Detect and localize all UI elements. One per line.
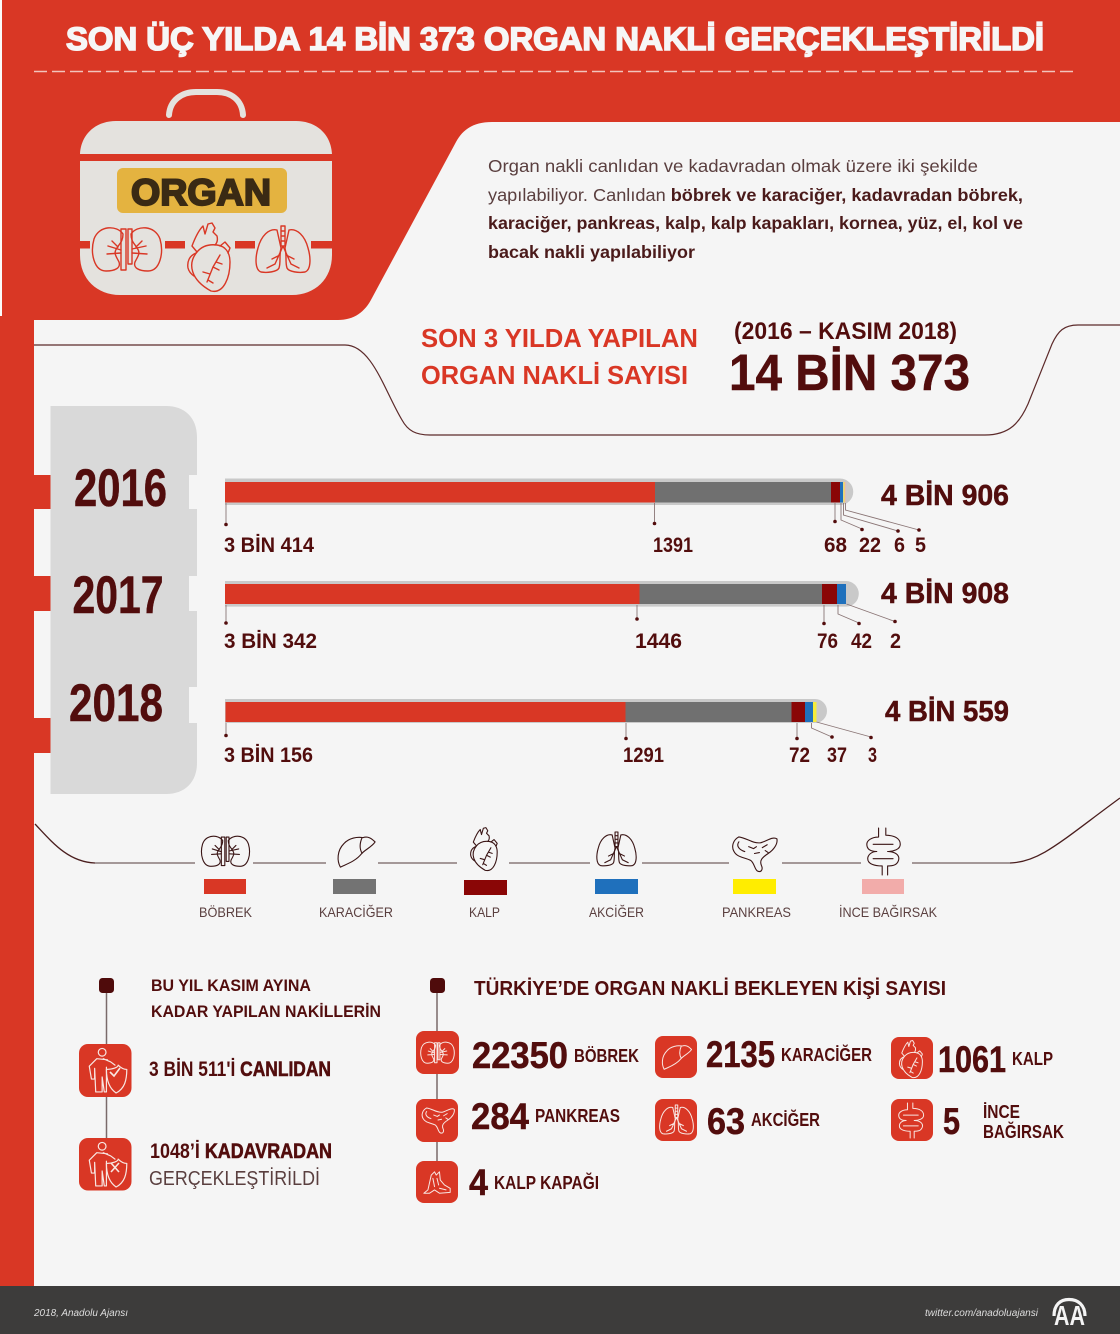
legend item: lungs [589, 832, 644, 920]
legend item: kidney: BÖBREK [199, 903, 253, 920]
deceased donor count: 1048’İ KADAVRADAN [150, 1140, 332, 1163]
footer bar [0, 1286, 1120, 1334]
intro paragraph: bacak nakli yapılabiliyor [488, 242, 695, 262]
legend item: small intestine [839, 828, 938, 920]
stat: pancreas: 284 [471, 1096, 529, 1137]
heading: three-year organ transplants: SON 3 YILDA YAPILAN [421, 323, 698, 353]
stat: heart: 1061 [938, 1039, 1006, 1080]
bar chart 2018 [224, 699, 877, 767]
year column [50, 406, 197, 794]
legend item: lungs: AKCİĞER [589, 903, 644, 920]
bar chart 2016: 1391 [653, 534, 693, 557]
stat: lungs: AKCİĞER [751, 1109, 820, 1130]
deceased donor count: GERÇEKLEŞTİRİLDİ [149, 1167, 320, 1190]
legend item: small intestine: İNCE BAĞIRSAK [839, 903, 938, 920]
stat: small intestine [891, 1099, 1064, 1142]
year 2017: 2017 [72, 566, 164, 625]
stat: kidney: BÖBREK [574, 1046, 639, 1066]
bar chart 2018: 37 [827, 744, 847, 767]
footer credit: 2018, Anadolu Ajansı [33, 1308, 128, 1319]
icon: organ suitcase: ORGAN [131, 172, 271, 213]
stat: liver: 2135 [706, 1034, 775, 1075]
total 2016: 4 BİN 906 [881, 480, 1009, 512]
icon: Anadolu Agency logo: AA [1054, 1300, 1085, 1331]
bar chart 2018: 3 [868, 744, 877, 767]
frame line bottom [35, 798, 1120, 863]
panel: people waiting for transplants [416, 977, 1064, 1203]
stat: kidney: 22350 [472, 1035, 568, 1076]
left white margin [0, 0, 3, 317]
legend item: pancreas: PANKREAS [722, 904, 791, 920]
bar chart 2016: 6 [894, 534, 905, 557]
stat: lungs: 63 [707, 1101, 745, 1142]
legend item: heart: KALP [469, 904, 500, 920]
stat: kidney [416, 1031, 639, 1076]
legend item: heart [464, 828, 507, 920]
bar chart 2017: 1446 [635, 630, 682, 653]
bar chart 2016: 22 [859, 534, 881, 557]
stat: small intestine: İNCE [983, 1102, 1020, 1122]
bar chart 2017: 3 BİN 342 [224, 630, 317, 653]
red year tabs [34, 475, 52, 753]
heading: three-year organ transplants: ORGAN NAKLİ SAYISI [421, 360, 688, 390]
stat: lungs [655, 1099, 820, 1142]
living donor count: 3 BİN 511'İ CANLIDAN [149, 1058, 331, 1081]
stat: pancreas [416, 1096, 620, 1142]
stat: heart valve [416, 1161, 599, 1203]
intro paragraph: yapılabiliyor. Canlıdan böbrek ve karaciğer, kadavradan böbrek, [488, 185, 1023, 205]
subheading: waiting list: TÜRKİYE’DE ORGAN NAKLİ BEKLEYEN KİŞİ SAYISI [474, 977, 946, 1000]
bar chart 2018: 72 [789, 744, 810, 767]
bar chart 2016: 5 [915, 534, 926, 557]
bar chart 2017: 76 [817, 630, 838, 653]
bar chart 2016 [224, 478, 926, 557]
subheading: this year: BU YIL KASIM AYINA [151, 977, 311, 995]
title dashed rule [34, 70, 1075, 72]
stat: heart [891, 1037, 1053, 1080]
legend item: pancreas [722, 837, 791, 920]
intro paragraph [488, 156, 1023, 262]
bar chart 2017: 2 [890, 630, 901, 653]
year 2018: 2018 [69, 674, 163, 733]
stat: liver: KARACİĞER [781, 1044, 872, 1065]
stat: pancreas: PANKREAS [535, 1106, 620, 1126]
date range: (2016 – KASIM 2018) [734, 318, 957, 345]
legend item: kidney [199, 836, 253, 920]
stat: heart valve: 4 [469, 1162, 488, 1203]
bar chart 2017 [224, 581, 901, 653]
bar chart 2017: 42 [851, 630, 872, 653]
frame line top [34, 325, 1120, 435]
legend item: liver [319, 837, 393, 920]
title: SON ÜÇ YILDA 14 BİN 373 ORGAN NAKLİ GERÇEKLEŞTİRİLDİ [66, 21, 1044, 57]
stat: small intestine: BAĞIRSAK [983, 1121, 1064, 1142]
total 2018: 4 BİN 559 [885, 696, 1009, 728]
bar chart 2018: 1291 [623, 744, 664, 767]
subheading: this year [151, 977, 381, 1021]
footer twitter handle: twitter.com/anadoluajansi [925, 1308, 1039, 1319]
subheading: this year: KADAR YAPILAN NAKİLLERİN [151, 1003, 381, 1021]
icon: living donor [79, 1044, 132, 1097]
bar chart 2016: 68 [824, 534, 847, 557]
heading: three-year organ transplants [421, 323, 698, 390]
icon: deceased donor [79, 1138, 132, 1190]
icon: organ suitcase [80, 92, 332, 295]
intro paragraph: karaciğer, pankreas, kalp, kalp kapakları, kornea, yüz, el, kol ve [488, 213, 1023, 233]
total 2017: 4 BİN 908 [881, 578, 1009, 610]
panel: transplants this year [79, 977, 381, 1190]
stat: small intestine: 5 [943, 1101, 960, 1142]
bar chart 2018: 3 BİN 156 [224, 744, 313, 767]
legend [199, 828, 938, 920]
stat: heart valve: KALP KAPAĞI [494, 1172, 599, 1193]
deceased donor count [149, 1140, 332, 1190]
total number: 14 BİN 373 [729, 344, 970, 401]
stat: heart: KALP [1012, 1049, 1053, 1069]
bar chart 2016: 3 BİN 414 [224, 534, 314, 557]
intro paragraph: Organ nakli canlıdan ve kadavradan olmak üzere iki şekilde [488, 156, 978, 176]
year 2016: 2016 [74, 459, 167, 518]
legend item: liver: KARACİĞER [319, 903, 393, 920]
stat: liver [655, 1034, 872, 1078]
